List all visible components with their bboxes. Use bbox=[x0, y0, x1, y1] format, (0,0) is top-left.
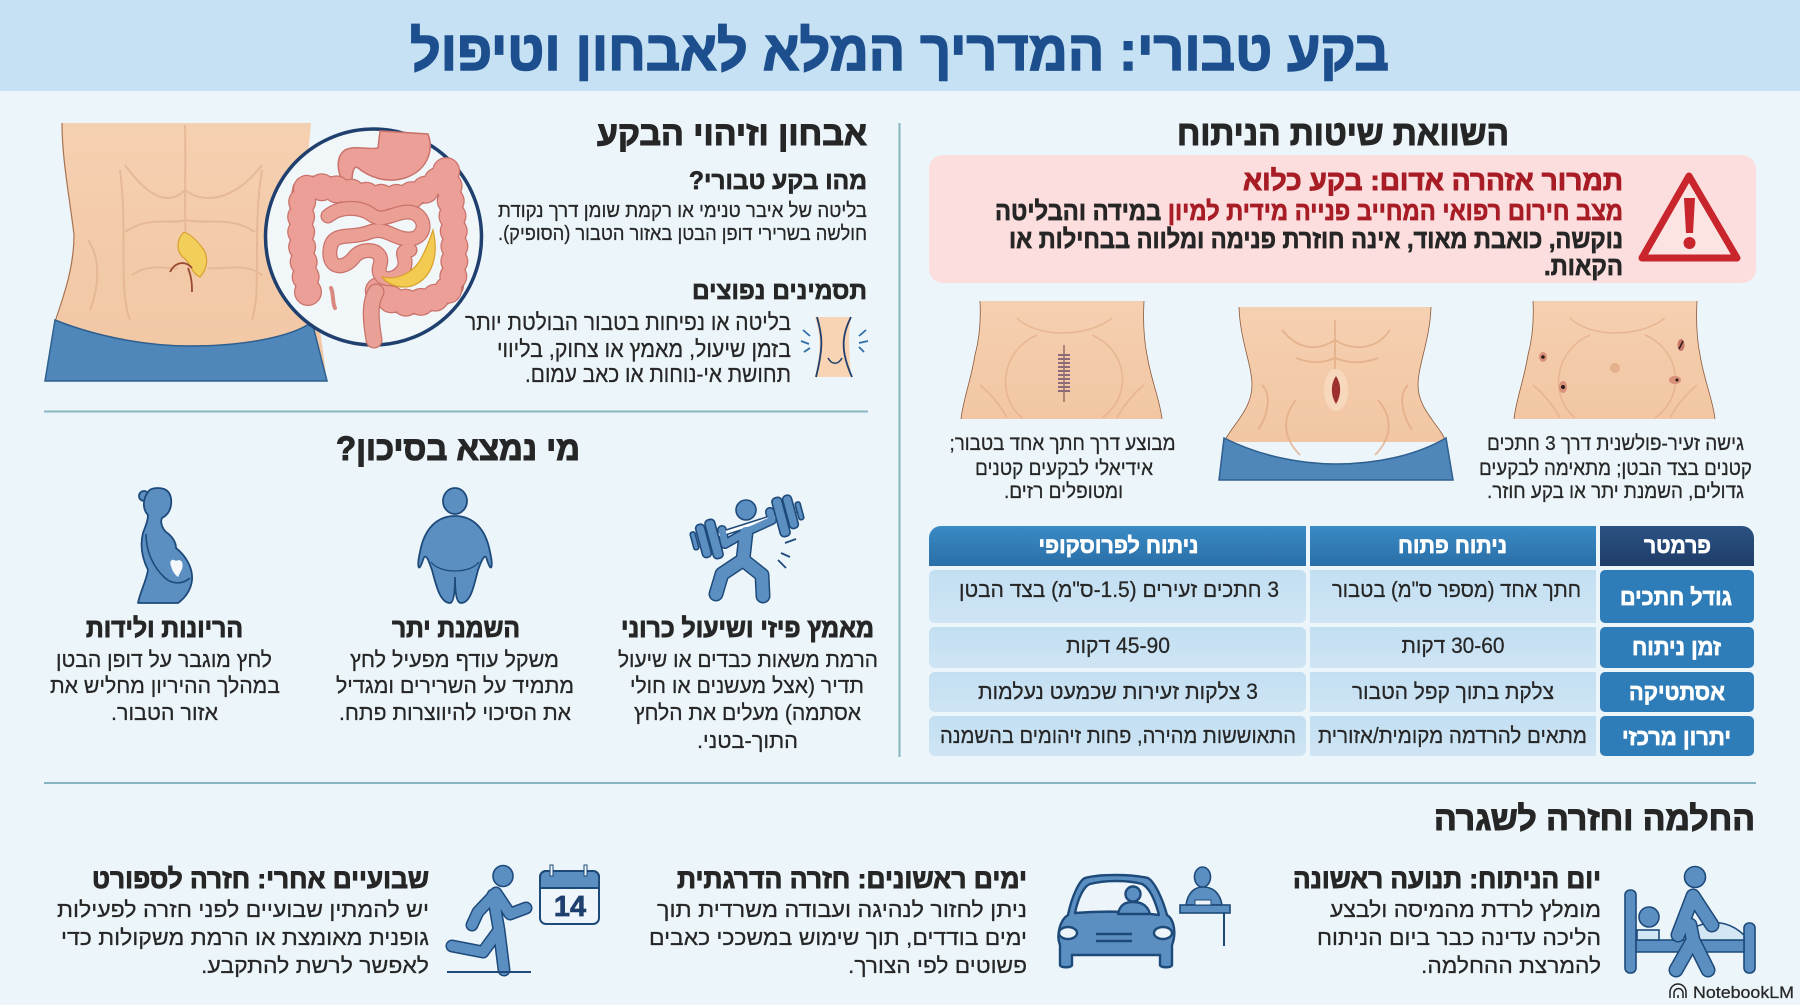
text: day of surgery bbox=[1293, 864, 1601, 978]
icon: bulging belly bbox=[801, 317, 868, 377]
table row: aesthetics bbox=[929, 672, 1754, 712]
illustration: magnified intestines bbox=[266, 129, 482, 345]
table header row: ניתוח פתוח bbox=[1398, 533, 1507, 558]
table row: key advantage: מתאים להרדמה מקומית/אזורית bbox=[1318, 723, 1587, 748]
label: obesity bbox=[336, 613, 574, 725]
table row: surgery time: זמן ניתוח bbox=[1632, 634, 1722, 660]
text: symptoms: בזמן שיעול, מאמץ או צחוק, בליווי bbox=[497, 336, 791, 362]
label: pregnancy: לחץ מוגבר על דופן הבטן bbox=[56, 647, 272, 672]
panel: risk groups bbox=[50, 430, 878, 753]
table row: surgery time: 45-90 דקות bbox=[1066, 633, 1170, 658]
alert text: מצב חירום רפואי המחייב פנייה מידית למיון במידה והבליטה bbox=[995, 196, 1623, 226]
heading: surgery comparison: השוואת שיטות הניתוח bbox=[1177, 114, 1509, 153]
label: physical strain: הרמת משאות כבדים או שיעול bbox=[618, 647, 878, 672]
text: day of surgery: מומלץ לרדת מהמיסה ולבצע bbox=[1330, 897, 1601, 922]
label: pregnancy: אזור הטבור. bbox=[111, 700, 218, 725]
icon: pregnant woman bbox=[138, 488, 192, 603]
text: day of surgery: הליכה עדינה כבר ביום הניתוח bbox=[1317, 925, 1601, 950]
label: physical strain: תדיר (אצל מעשנים או חולי bbox=[630, 673, 864, 698]
text: first days: ימים בודדים, תוך שימוש במשככי כאבים bbox=[649, 925, 1027, 950]
caption: open surgery: מבוצע דרך חתך אחד בטבור; bbox=[950, 432, 1176, 455]
table row: aesthetics: אסתטיקה bbox=[1629, 679, 1725, 705]
icon: patient walking from bed bbox=[1625, 866, 1755, 973]
table row: key advantage: יתרון מרכזי bbox=[1622, 724, 1731, 750]
table row: key advantage bbox=[929, 716, 1754, 756]
subheading: what is hernia: מהו בקע טבורי? bbox=[689, 167, 867, 195]
icon: warning triangle bbox=[1642, 176, 1737, 258]
icon: calendar 14 days bbox=[540, 865, 599, 924]
header band bbox=[0, 0, 1800, 91]
caption: open surgery: ומטופלים רזים. bbox=[1004, 480, 1123, 503]
label: physical strain: התוך-בטני. bbox=[697, 728, 798, 753]
subheading: symptoms: תסמינים נפוצים bbox=[692, 277, 867, 305]
text: first days: פשוטים לפי הצורך. bbox=[848, 953, 1027, 978]
text: two weeks after: יש להמתין שבועיים לפני חזרה לפעילות bbox=[57, 897, 429, 922]
text: two weeks after: שבועיים אחרי: חזרה לספורט bbox=[92, 864, 429, 894]
text: symptoms bbox=[465, 309, 791, 387]
table row: surgery time bbox=[929, 627, 1754, 668]
table row: incision size bbox=[929, 570, 1754, 623]
table row: aesthetics: צלקת בתוך קפל הטבור bbox=[1352, 679, 1554, 704]
label: pregnancy: במהלך ההיריון מחליש את bbox=[50, 673, 280, 698]
text: definition: חולשה בשרירי דופן הבטן באזור הטבור (הסופיק). bbox=[498, 223, 867, 245]
caption: open surgery bbox=[950, 432, 1176, 503]
illustration: torso with hernia bbox=[45, 123, 327, 381]
icon: weightlifter bbox=[690, 494, 804, 596]
label: physical strain: אסתמה) מעלים את הלחץ bbox=[634, 700, 861, 725]
label: pregnancy bbox=[50, 613, 280, 725]
label: obesity: השמנת יתר bbox=[392, 613, 520, 643]
heading: recovery: החלמה וחזרה לשגרה bbox=[1434, 800, 1755, 838]
text: symptoms: בליטה או נפיחות בטבור הבולטת יותר bbox=[465, 309, 791, 335]
table row: aesthetics: 3 צלקות זעירות שכמעט נעלמות bbox=[978, 679, 1258, 704]
icon: calendar 14 days: 14 bbox=[554, 891, 586, 923]
panel: recovery bbox=[57, 800, 1755, 978]
icon: overweight person bbox=[418, 488, 492, 603]
illustration: healthy abdomen with jeans bbox=[1219, 307, 1453, 480]
table row: incision size: גודל חתכים bbox=[1620, 584, 1732, 610]
table header row: פרמטר bbox=[1644, 533, 1711, 558]
label: physical strain: מאמץ פיזי ושיעול כרוני bbox=[621, 613, 874, 643]
title: בקע טבורי: המדריך המלא לאבחון וטיפול bbox=[410, 19, 1389, 82]
text: first days: ימים ראשונים: חזרה הדרגתית bbox=[677, 864, 1027, 894]
text: two weeks after: לאפשר לרשת להתקבע. bbox=[201, 953, 429, 978]
NotebookLM watermark: NotebookLM bbox=[1693, 984, 1794, 1002]
caption: open surgery: אידיאלי לבקעים קטנים bbox=[975, 457, 1153, 480]
illustration: open surgery abdomen bbox=[961, 301, 1162, 419]
caption: laparoscopic: גדולים, השמנת יתר או בקע חוזר. bbox=[1487, 480, 1744, 503]
text: definition bbox=[498, 200, 867, 245]
heading: who is at risk: מי נמצא בסיכון? bbox=[336, 430, 580, 468]
icon: runner bbox=[447, 866, 531, 972]
table row: incision size: חתך אחד (מספר ס"מ) בטבור bbox=[1332, 577, 1581, 602]
alert text: הקאות. bbox=[1544, 251, 1623, 281]
label: obesity: משקל עודף מפעיל לחץ bbox=[350, 647, 559, 672]
alert text: נוקשה, כואבת מאוד, אינה חוזרת פנימה ומלווה בבחילות או bbox=[1009, 224, 1623, 254]
heading: diagnosis: אבחון וזיהוי הבקע bbox=[597, 115, 867, 153]
text: day of surgery: להמרצת ההחלמה. bbox=[1421, 953, 1601, 978]
alert heading: תמרור אזהרה אדום: בקע כלוא bbox=[1243, 165, 1623, 196]
comparison table bbox=[929, 526, 1754, 756]
caption: laparoscopic: קטנים בצד הבטן; מתאימה לבקעים bbox=[1479, 457, 1752, 480]
alert text bbox=[995, 196, 1623, 281]
label: obesity: את הסיכוי להיווצרות פתח. bbox=[339, 700, 571, 725]
table header row bbox=[929, 526, 1754, 566]
text: day of surgery: יום הניתוח: תנועה ראשונה bbox=[1293, 864, 1601, 894]
panel: surgery comparison bbox=[929, 114, 1756, 756]
label: physical strain bbox=[618, 613, 878, 753]
label: pregnancy: הריונות ולידות bbox=[86, 613, 243, 643]
label: obesity: מתמיד על השרירים ומגדיל bbox=[336, 673, 574, 698]
text: definition: בליטה של איבר טנימי או רקמת שומן דרך נקודת bbox=[498, 200, 867, 222]
text: two weeks after bbox=[57, 864, 429, 978]
table row: key advantage: התאוששות מהירה, פחות זיהומים בהשמנה bbox=[940, 723, 1296, 748]
table header row: ניתוח לפרוסקופי bbox=[1038, 533, 1198, 558]
icon: car and office desk bbox=[1058, 867, 1230, 967]
text: symptoms: תחושת אי-נוחות או כאב עמום. bbox=[525, 361, 791, 387]
table row: incision size: 3 חתכים זעירים (1.5-ס"מ) בצד הבטן bbox=[959, 577, 1279, 602]
caption: laparoscopic bbox=[1479, 432, 1752, 503]
illustration: laparoscopic abdomen bbox=[1514, 301, 1715, 419]
panel: diagnosis bbox=[45, 115, 868, 387]
caption: laparoscopic: גישה זעיר-פולשנית דרך 3 חתכים bbox=[1487, 432, 1744, 455]
callout: red flag warning bbox=[929, 155, 1756, 283]
text: first days: ניתן לחזור לנהיגה ועבודה משרדית תוך bbox=[657, 897, 1027, 922]
table row: surgery time: 30-60 דקות bbox=[1402, 633, 1504, 658]
text: two weeks after: גופנית מאומצת או הרמת משקולות כדי bbox=[61, 925, 429, 950]
text: first days bbox=[649, 864, 1027, 978]
